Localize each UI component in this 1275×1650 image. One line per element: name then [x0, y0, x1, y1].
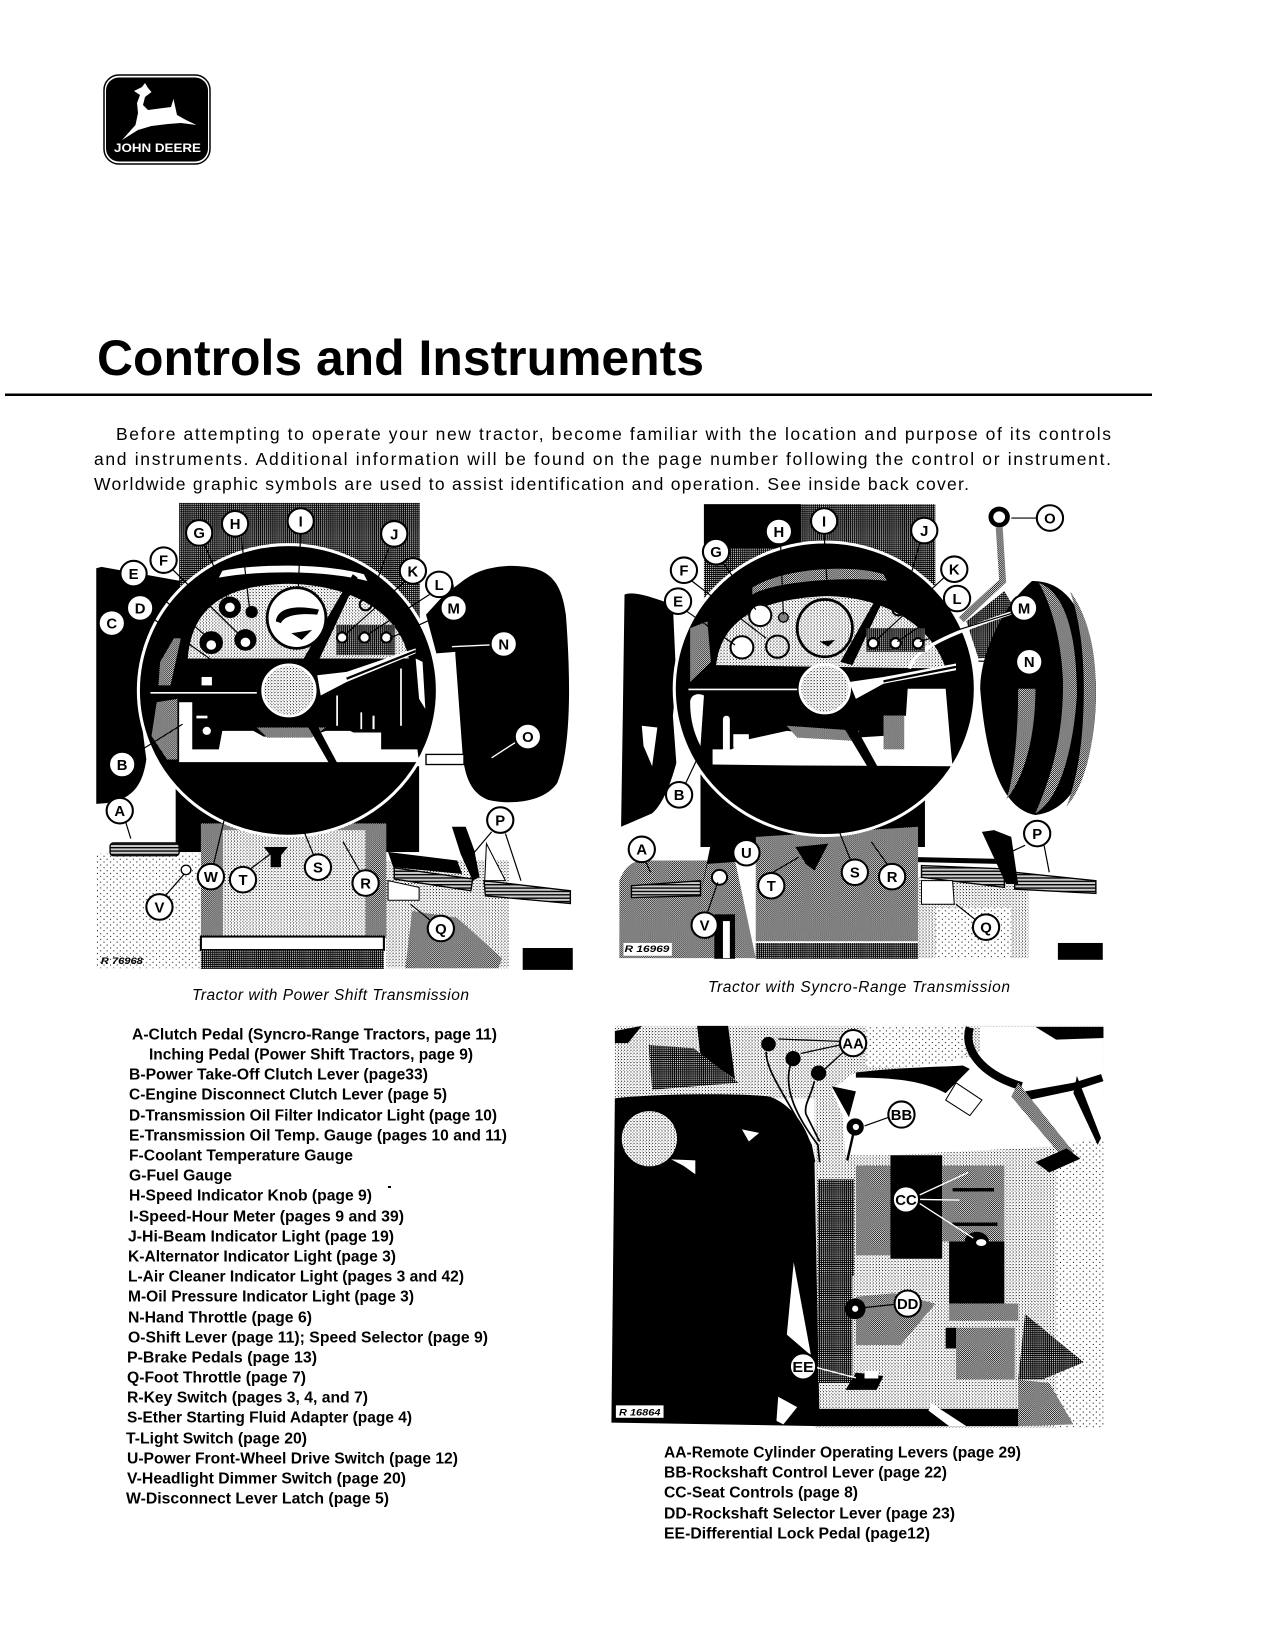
callout letters: R: [360, 877, 371, 892]
legend list: controls A to W: L-Air Cleaner Indicator Light (pages 3 and 42): [128, 1268, 464, 1286]
legend list: controls A to W: P-Brake Pedals (page 13): [127, 1350, 317, 1366]
steering wheel spokes and hub: [150, 574, 416, 800]
legend list: controls A to W: W-Disconnect Lever Latch (page 5): [126, 1490, 389, 1508]
callout letters: J: [920, 524, 928, 540]
legend list: controls A to W: O-Shift Lever (page 11); Speed Selector (page 9): [128, 1330, 488, 1346]
photo: tractor with power shift transmission: R 76968: [101, 956, 144, 967]
legend list: controls AA to EE: [664, 1444, 1021, 1542]
legend list: controls A to W: T-Light Switch (page 20): [126, 1430, 307, 1448]
callout letters: N: [1024, 655, 1035, 671]
callout letters: P: [495, 814, 505, 829]
photo: rear controls: R 16864: [619, 1407, 661, 1417]
callout letters: [99, 508, 541, 941]
legend list: controls AA to EE: DD-Rockshaft Selector Lever (page 23): [664, 1506, 955, 1522]
shift lever: [961, 509, 1007, 620]
callout letters: B: [674, 788, 684, 804]
callout letters: [790, 1030, 921, 1380]
legend list: controls A to W: U-Power Front-Wheel Drive Switch (page 12): [127, 1450, 458, 1468]
callout letters: O: [1044, 512, 1056, 527]
callout letters: E: [673, 595, 683, 611]
instrument gauges: [731, 600, 925, 658]
cylinder levers: [761, 1037, 989, 1319]
callout letters: D: [135, 601, 145, 617]
photo: rear controls: [611, 1026, 1103, 1428]
callout letters: J: [390, 527, 398, 543]
callout letters: DD: [897, 1297, 919, 1313]
callout letters: U: [741, 846, 752, 862]
column and seat base: [818, 1155, 1084, 1426]
callout letters: V: [700, 919, 710, 934]
callout letters: K: [408, 564, 419, 580]
callout letters: S: [850, 866, 860, 882]
callout letters: AA: [842, 1037, 864, 1053]
callout letters: L: [953, 592, 962, 608]
callout letters: CC: [895, 1193, 917, 1209]
callout letters: I: [299, 515, 303, 530]
callout letters: W: [204, 870, 218, 886]
callout letters: B: [117, 758, 128, 774]
photo: tractor with syncro-range transmission: R 16969: [625, 944, 671, 954]
legend list: controls A to W: S-Ether Starting Fluid Adapter (page 4): [127, 1410, 412, 1426]
legend list: controls AA to EE: EE-Differential Lock Pedal (page12): [664, 1526, 930, 1542]
legend list: controls A to W: M-Oil Pressure Indicator Light (page 3): [128, 1288, 414, 1306]
legend list: controls A to W: R-Key Switch (pages 3, 4, and 7): [127, 1390, 368, 1406]
callout letters: H: [774, 525, 784, 541]
callout letters: F: [159, 554, 168, 569]
callout letters: A: [636, 843, 648, 859]
callout letters: M: [1018, 601, 1030, 617]
callout letters: R: [887, 870, 898, 886]
callout letters: T: [767, 879, 776, 895]
intro paragraph: Before attempting to operate your new tractor, become familiar with the location and purpose of its controls: [116, 424, 1111, 444]
legend list: controls A to W: I-Speed-Hour Meter (pages 9 and 39): [129, 1208, 404, 1226]
callout letters: V: [154, 900, 165, 916]
steering wheel spokes and hub: [688, 579, 1011, 796]
legend list: controls A to W: K-Alternator Indicator Light (page 3): [128, 1248, 396, 1266]
intro paragraph: and instruments. Additional information will be found on the page number following the control or instrument.: [94, 449, 1111, 469]
callout letters: I: [822, 515, 826, 530]
callout letters: N: [498, 638, 509, 653]
callout letters: L: [435, 578, 444, 594]
legend list: controls A to W: E-Transmission Oil Temp. Gauge (pages 10 and 11): [129, 1128, 507, 1144]
callout letters: C: [106, 617, 118, 632]
callout letters: K: [949, 563, 960, 579]
instrument gauges: [200, 588, 395, 655]
leader lines: [778, 1039, 896, 1308]
callout letters: O: [522, 730, 534, 746]
title: Controls and Instruments: [97, 330, 704, 386]
legend list: controls AA to EE: AA-Remote Cylinder Operating Levers (page 29): [664, 1444, 1021, 1462]
photo: tractor with power shift transmission: [96, 503, 573, 970]
legend list: controls A to W: A-Clutch Pedal (Syncro-Range Tractors, page 11): [132, 1026, 497, 1044]
caption: syncro-range: Tractor with Syncro-Range Transmission: [708, 979, 1010, 996]
callout letters: Q: [435, 922, 447, 938]
callout letters: [629, 505, 1063, 940]
callout letters: H: [230, 517, 240, 533]
legend list: controls A to W: H-Speed Indicator Knob (page 9): [129, 1188, 372, 1204]
photo: tractor with syncro-range transmission: [619, 504, 1103, 960]
legend list: controls AA to EE: BB-Rockshaft Control Lever (page 22): [664, 1464, 947, 1482]
leader lines: [120, 534, 521, 921]
callout letters: G: [710, 545, 722, 561]
legend list: controls A to W: F-Coolant Temperature Gauge: [129, 1148, 353, 1164]
seat cushion: [832, 1027, 1103, 1155]
legend list: controls A to W: G-Fuel Gauge: [129, 1168, 232, 1184]
legend list: controls A to W: J-Hi-Beam Indicator Light (page 19): [128, 1228, 394, 1246]
callout letters: P: [1032, 827, 1042, 843]
legend list: controls A to W: V-Headlight Dimmer Switch (page 20): [127, 1470, 406, 1488]
callout letters: BB: [891, 1108, 912, 1124]
legend list: controls A to W: C-Engine Disconnect Clutch Lever (page 5): [129, 1086, 447, 1104]
caption: power shift: Tractor with Power Shift Transmission: [192, 987, 469, 1004]
legend list: controls A to W: N-Hand Throttle (page 6): [128, 1310, 312, 1326]
callout letters: M: [447, 601, 460, 617]
callout letters: T: [238, 873, 248, 889]
legend list: controls A to W: [126, 1026, 507, 1508]
legend list: controls A to W: D-Transmission Oil Filter Indicator Light (page 10): [129, 1108, 497, 1124]
pedals: [110, 827, 570, 904]
callout letters: S: [313, 861, 323, 877]
callout letters: EE: [792, 1360, 814, 1376]
logo: John Deere: [104, 75, 210, 164]
callout letters: G: [193, 526, 205, 542]
legend list: controls AA to EE: CC-Seat Controls (page 8): [664, 1484, 858, 1502]
callout letters: E: [129, 567, 139, 583]
callout letters: A: [114, 804, 126, 820]
intro paragraph: Worldwide graphic symbols are used to assist identification and operation. See inside back cover.: [94, 474, 969, 494]
legend list: controls A to W: Q-Foot Throttle (page 7): [127, 1370, 306, 1386]
callout letters: Q: [980, 921, 992, 936]
callout letters: F: [679, 564, 689, 580]
leader lines: [645, 518, 1049, 919]
logo: John Deere: JOHN DEERE: [114, 143, 201, 155]
legend list: controls A to W: Inching Pedal (Power Shift Tractors, page 9): [149, 1046, 473, 1064]
pedals: [631, 830, 1096, 904]
intro paragraph: [94, 424, 1111, 494]
legend list: controls A to W: B-Power Take-Off Clutch Lever (page33): [129, 1066, 428, 1084]
